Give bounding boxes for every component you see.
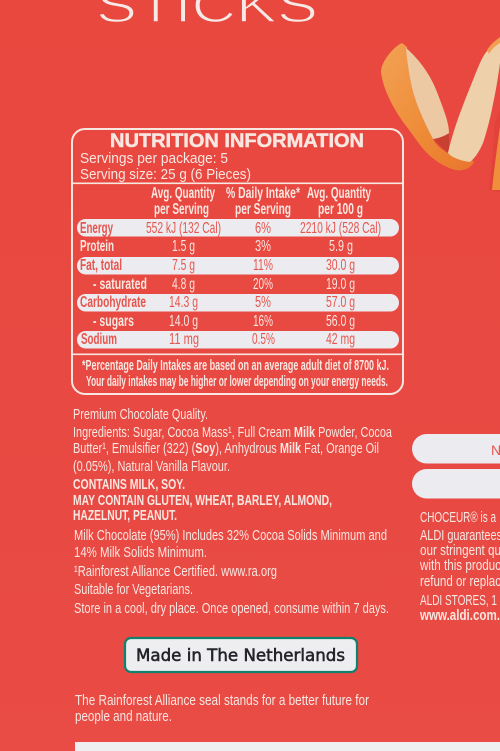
- table row: fat, total: 11%: [253, 257, 273, 274]
- table row: protein: [80, 238, 353, 255]
- text block: ingredients and allergens: (0.05%), Natural Vanilla Flavour.: [73, 458, 230, 475]
- text block: chocolate details and storage: Store in a cool, dry place. Once opened, consume within 7 days.: [74, 600, 389, 617]
- table row: fat, total: 7.5 g: [172, 257, 195, 274]
- table row: protein: 3%: [255, 238, 271, 255]
- table column headers: per Serving: [235, 201, 291, 218]
- table row: saturated: 19.0 g: [326, 276, 355, 293]
- table column headers: [151, 185, 371, 218]
- table column headers: Avg. Quantity: [151, 185, 215, 202]
- table row: protein: 5.9 g: [329, 238, 353, 255]
- table row: fat, total: Fat, total: [80, 257, 122, 274]
- text: servings per package: Servings per package: 5: [80, 150, 228, 167]
- text block: ingredients and allergens: CONTAINS MILK, SOY.: [73, 476, 185, 493]
- table row: carbohydrate: 14.3 g: [169, 294, 198, 311]
- badge: made in the netherlands: Made in The Netherlands: [136, 646, 345, 665]
- table row: saturated: 20%: [253, 276, 273, 293]
- table row: sodium: 0.5%: [252, 331, 275, 348]
- text block: chocolate details and storage: Milk Chocolate (95%) Includes 32% Cocoa Solids Minimum and: [74, 527, 387, 544]
- table row: saturated: - saturated: [93, 276, 147, 293]
- table row: saturated: [93, 276, 355, 293]
- table row: sodium: 42 mg: [326, 331, 355, 348]
- text block: chocolate details and storage: 14% Milk Solids Minimum.: [74, 544, 207, 561]
- table row: carbohydrate: 57.0 g: [326, 294, 355, 311]
- text block: ingredients and allergens: HAZELNUT, PEANUT.: [73, 507, 177, 524]
- table column headers: per 100 g: [318, 201, 363, 218]
- text: rainforest alliance statement: people and nature.: [75, 708, 172, 725]
- divider: header rule: [72, 182, 403, 184]
- text block: ingredients and allergens: Premium Chocolate Quality.: [73, 406, 208, 423]
- table row: energy: 2210 kJ (528 Cal): [300, 220, 381, 237]
- table column headers: Avg. Quantity: [307, 185, 371, 202]
- table row: saturated: 4.8 g: [172, 276, 195, 293]
- pill: right panel bottom: [412, 469, 500, 498]
- text: rainforest alliance statement: [75, 692, 369, 725]
- table row: sodium: 11 mg: [169, 331, 199, 348]
- text block: chocolate details and storage: Suitable for Vegetarians.: [74, 581, 193, 598]
- table row: sodium: [77, 331, 399, 348]
- heading: nutrition information: NUTRITION INFORMATION: [110, 131, 364, 152]
- panel: nutrition information: [72, 129, 403, 394]
- table row: energy: 552 kJ (132 Cal): [146, 220, 221, 237]
- text block: ingredients and allergens: Butter¹, Emulsifier (322) (Soy), Anhydrous Milk Fat, Orange Oil: [73, 440, 379, 457]
- table row: sugars: 14.0 g: [169, 313, 198, 330]
- table row: sugars: [93, 313, 355, 330]
- table row: carbohydrate: 5%: [255, 294, 271, 311]
- table row: energy: Energy: [80, 220, 113, 237]
- panel: bottom white box: [75, 742, 500, 751]
- text block: ingredients and allergens: Ingredients: Sugar, Cocoa Mass¹, Full Cream Milk Powder, Cocoa: [73, 424, 392, 441]
- table row: carbohydrate: Carbohydrate: [80, 294, 146, 311]
- table column headers: % Daily Intake*: [226, 185, 301, 202]
- pill: right panel top: [412, 434, 500, 464]
- table row: fat, total: 30.0 g: [326, 257, 355, 274]
- text: rainforest alliance statement: The Rainforest Alliance seal stands for a better future for: [75, 692, 369, 709]
- icon: orange peel curl: [381, 37, 500, 192]
- badge: made in the netherlands: [125, 638, 357, 672]
- table row: fat, total: [77, 257, 399, 274]
- table row: sugars: 16%: [253, 313, 273, 330]
- divider: footnote rule: [72, 354, 403, 355]
- footnote: percentage daily intakes: [82, 357, 389, 390]
- table row: energy: [77, 219, 399, 237]
- table row: protein: Protein: [80, 238, 114, 255]
- table row: energy: 6%: [255, 220, 271, 237]
- table row: sugars: - sugars: [93, 313, 134, 330]
- text block: chocolate details and storage: [74, 527, 389, 617]
- table row: carbohydrate: [77, 294, 399, 312]
- table column headers: per Serving: [154, 201, 209, 218]
- text block: brand guarantee: [419, 509, 500, 624]
- table row: sugars: 56.0 g: [326, 313, 355, 330]
- text block: ingredients and allergens: [73, 406, 392, 524]
- text: serving size: Serving size: 25 g (6 Pieces): [80, 166, 251, 183]
- table row: protein: 1.5 g: [172, 238, 195, 255]
- text block: chocolate details and storage: ¹Rainforest Alliance Certified. www.ra.org: [74, 563, 277, 580]
- text block: ingredients and allergens: MAY CONTAIN GLUTEN, WHEAT, BARLEY, ALMOND,: [73, 492, 332, 509]
- table row: sodium: Sodium: [81, 331, 117, 348]
